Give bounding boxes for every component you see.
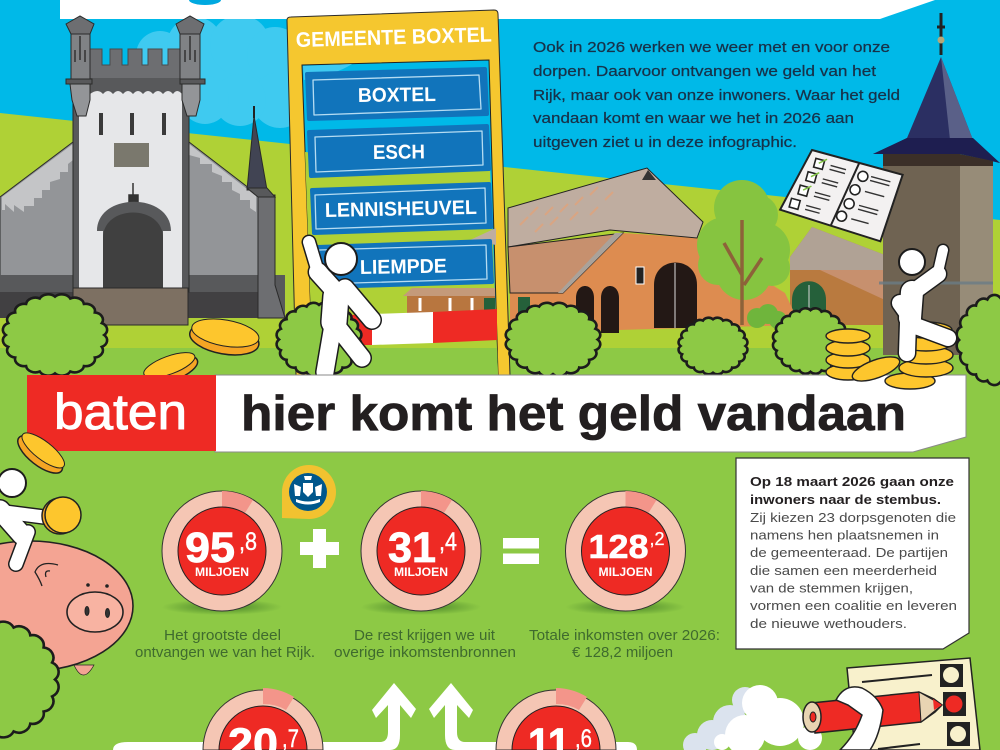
street sign: Lennisheuvel [312,184,491,233]
book checklist [789,155,825,213]
Rijksoverheid badge [282,465,336,519]
castle slit windows [99,113,166,135]
castle gate door [103,212,163,288]
farm small door 2 [601,286,619,333]
note body: van de stemmen krijgen, [750,580,913,596]
coin stack right [885,322,953,389]
ballot paper [847,658,980,750]
farm roof tile marks [520,187,613,232]
tower left face [883,160,960,355]
castle tower body [73,78,189,292]
note body: Zij kiezen 23 dorpsgenoten die [750,510,956,525]
bush 5 [773,308,848,374]
sign board [287,10,510,375]
coin large [187,314,262,360]
stat: 128,2 miljoen: ,2 [650,529,664,549]
castle gate arch [97,202,171,288]
pig ear [35,564,58,586]
hand holding pencil [836,687,883,750]
bush 3 [506,303,600,376]
intro text: Rijk, maar ook van onze inwoners. Waar het geld [533,88,900,104]
street sign: Esch: ESCH [373,141,425,164]
intro text: Ook in 2026 werken we weer met en voor onze [533,40,890,56]
stat: 31,4 miljoen: MILJOEN [394,567,448,579]
stat: 31,4 miljoen: 31 [388,524,436,572]
farm left green window [518,297,530,317]
coin held [42,498,78,534]
farm lower roof [508,233,623,293]
caption: Rijk: Het grootste deel [164,628,281,644]
figure head [325,243,357,275]
coin tilted [849,352,903,386]
caption: totale inkomsten: € 128,2 miljoen [572,645,673,661]
intro text: vandaan komt en waar we het in 2026 aan [533,111,854,127]
bush 1 [3,294,107,376]
stat: 11,6 [496,688,616,750]
pig foot [74,665,94,675]
red pencil [803,692,942,733]
stat: 95,8 miljoen: ,8 [239,528,257,556]
tree [697,180,790,329]
arrow right [429,683,500,750]
bushes [3,294,1000,385]
ballot box 1 [940,664,963,687]
header white band [215,375,966,452]
street sign: Liempde: LIEMPDE [360,255,447,279]
header title: hier komt het geld vandaan [241,387,906,441]
coin stack left [826,329,870,380]
header banner [27,375,966,452]
background: sky [0,0,1000,375]
background: lawn [0,348,1000,750]
tower cross [937,13,945,55]
note heading: inwoners naar de stembus. [750,492,941,507]
arrow left [320,683,416,750]
farm roof ridge vent [642,170,656,180]
piggy bank [0,541,133,675]
stat: 128,2 miljoen: 128 [588,528,648,565]
stat: 95,8 miljoen: MILJOEN [195,567,249,579]
bush 2 [277,303,361,376]
street sign: Boxtel [307,69,487,119]
sign window sky [302,60,498,375]
header red tab [27,375,216,451]
cloud behind pencil [683,685,822,750]
farm back building [790,227,885,325]
background: hill [0,113,1000,375]
pig snout [67,592,123,632]
castle left turret [66,16,94,116]
election note box [736,458,969,649]
tree trunk [724,220,762,325]
pig eyes [87,584,89,586]
sign farmhouse [403,288,495,313]
note body: de gemeenteraad. De partijen [750,545,948,560]
bush 4 [679,318,747,374]
pig body [0,541,133,671]
caption: overige inkomsten: overige inkomstenbronnen [334,645,516,661]
castle parapet [90,49,182,80]
intro text: uitgeven ziet u in deze infographic. [533,135,797,151]
caption: Rijk: ontvangen we van het Rijk. [135,645,315,661]
barrier tape [350,309,497,345]
figure head [0,469,26,497]
stat: 128,2 miljoen [566,491,686,615]
note heading: Op 18 maart 2026 gaan onze [750,474,954,489]
stat: 31,4 miljoen: ,4 [439,528,457,556]
top title banner [60,0,935,19]
farm small door 1 [576,286,594,333]
stat: 95,8 miljoen: 95 [185,524,235,572]
castle right wing [189,142,258,292]
ballot box 3 [947,722,970,746]
intro text: dorpen. Daarvoor ontvangen we geld van het [533,64,876,80]
flow band and arrows [113,683,637,750]
header label: baten: baten [54,384,187,440]
coin falling [140,347,201,390]
figure on coins [899,249,948,353]
sign window hill [305,152,498,375]
street sign: Liempde [318,241,492,287]
bush over pig [0,622,59,737]
tower right face [960,160,993,355]
tower roof [873,57,1000,163]
street sign: Lennisheuvel: LENNISHEUVEL [325,197,477,222]
castle side turret [258,195,285,318]
castle plaque [114,143,149,167]
caption: totale inkomsten: Totale inkomsten over 2026: [529,628,720,644]
stat: 128,2 miljoen: MILJOEN [598,567,652,579]
castle [0,16,285,325]
tree small shrub [747,304,787,329]
stat: 31,4 miljoen [361,491,481,615]
castle right turret [176,16,205,116]
figure head [899,249,925,275]
castle corbels [90,78,182,94]
coin stacks [826,322,953,389]
farm main door [654,262,697,328]
castle left wing [0,142,73,292]
street sign: Boxtel: BOXTEL [358,84,436,107]
farm upper roof [508,168,703,247]
sign title: GEMEENTE BOXTEL [295,24,492,52]
caption: overige inkomsten: De rest krijgen we uit [354,628,495,644]
ballot box 2 [943,692,966,716]
church tower [873,13,1000,355]
equals sign [503,538,539,564]
note body: vormen een coalitie en leveren [750,598,957,613]
farm main building [508,168,800,333]
farm wall [510,233,800,333]
figure at sign [309,242,372,372]
note body: de nieuwe wethouders. [750,616,907,631]
sign farmhouse roof [470,228,496,245]
castle gate ornament [129,183,138,204]
tree crown [697,180,790,300]
bush 6 [957,295,1000,385]
stat: 95,8 miljoen [162,491,282,615]
castle wall bases [0,275,285,318]
street sign: Esch [309,126,489,176]
stat: 20,7 [203,688,323,750]
open book [779,146,903,242]
background: clouds [136,15,308,128]
figure on pig with coin [0,469,81,564]
information sign [287,10,510,375]
crest [294,476,322,504]
coin falling near pig [12,427,70,480]
farm small window [636,267,644,284]
note body: namens hen plaatsnemen in [750,528,939,542]
note body: die samen een meerderheid [750,563,937,578]
castle stone base [73,288,188,325]
plus sign [300,529,339,568]
castle spire [247,116,267,190]
